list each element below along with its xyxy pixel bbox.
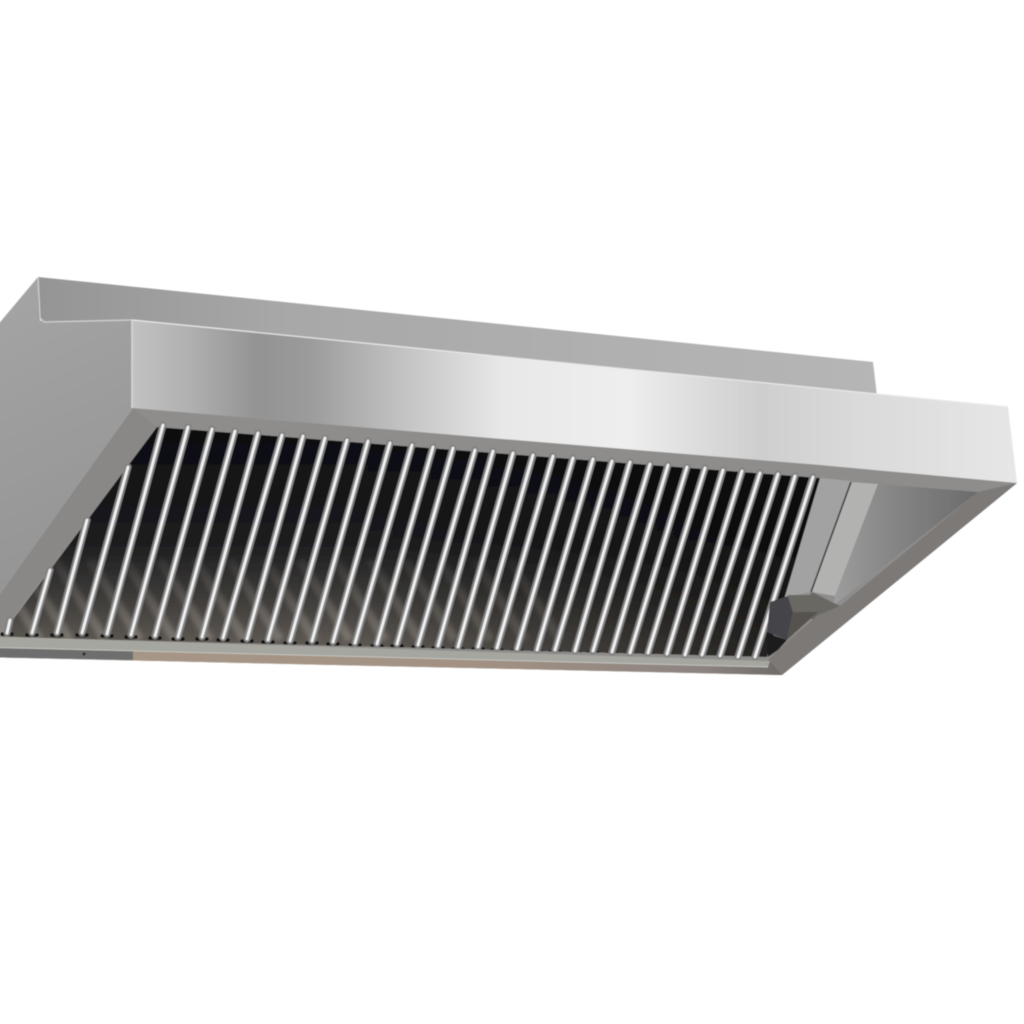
- filter bracket: [767, 592, 840, 657]
- right frame bottom corner: [768, 483, 1017, 675]
- front fascia band with brushed steel reflection: [132, 320, 1017, 483]
- underside frame: [0, 408, 1017, 675]
- front lower rail: [0, 636, 782, 675]
- right end interior panel: [762, 478, 878, 650]
- rear upstand panel: [38, 277, 877, 396]
- right end recessed cavity: [833, 484, 978, 606]
- hood left side panel: [0, 277, 133, 622]
- illustration: stainless steel exhaust hood: [0, 276, 1018, 676]
- baffle filter rods: [7, 425, 813, 657]
- grease filter grid background: [0, 427, 820, 659]
- hood body with soft photographic finish: [0, 277, 1017, 675]
